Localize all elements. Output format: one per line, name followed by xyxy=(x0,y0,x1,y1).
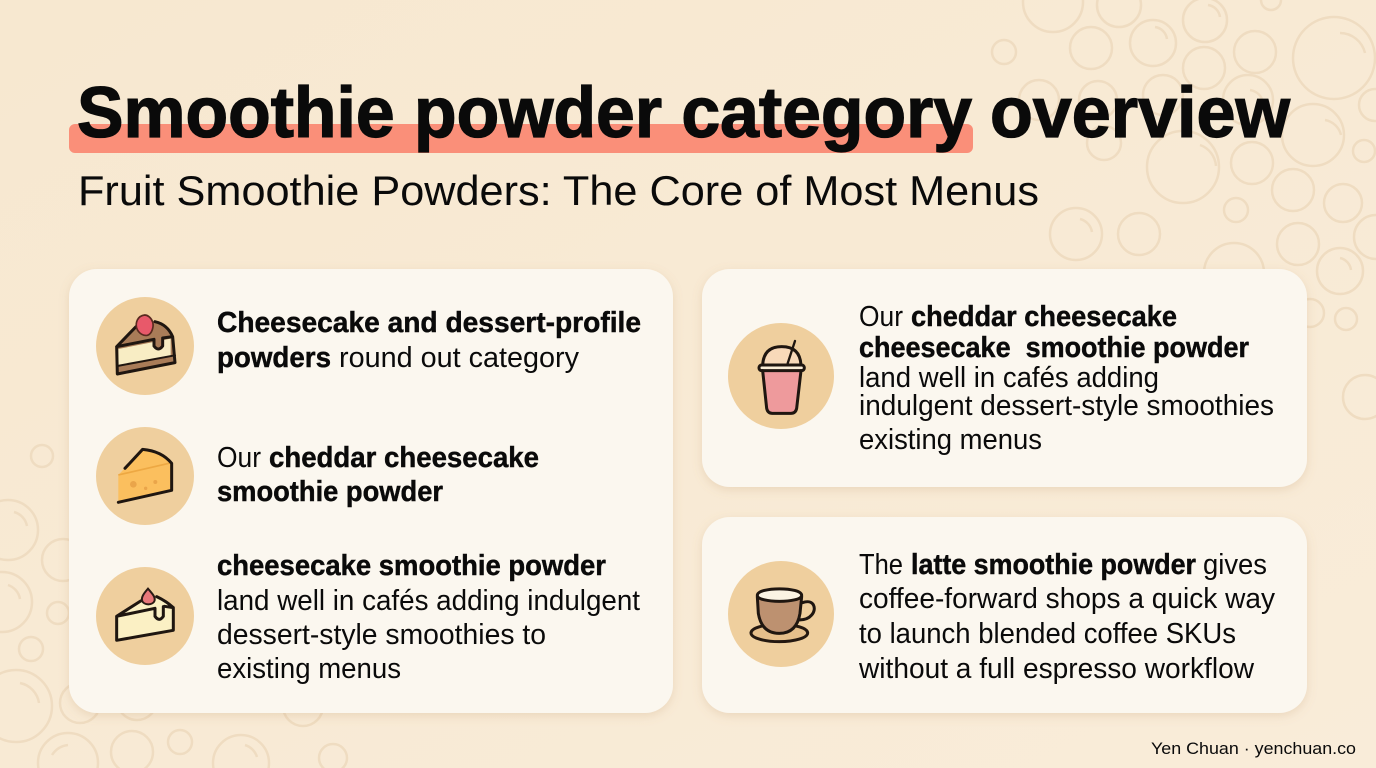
text: cheddar cheesecake smoothie powder: cheddar cheesecake xyxy=(911,301,1177,333)
text: our cheddar cheesecake: cheddar cheesecake xyxy=(269,442,539,474)
text: latte smoothie powder: The xyxy=(859,549,903,581)
text: cheesecake smoothie powder: cheesecake smoothie powder xyxy=(217,550,606,582)
panel: bottom right card xyxy=(702,517,1307,713)
text: latte smoothie powder: to launch blended coffee SKUs xyxy=(859,618,1236,650)
text: cheesecake and dessert-profile: round out category xyxy=(339,342,580,374)
text: latte smoothie powder: without a full espresso workflow xyxy=(858,653,1254,685)
text: cheddar cheesecake smoothie powder: indulgent dessert-style smoothies xyxy=(859,390,1274,422)
panel: top right card xyxy=(702,269,1307,487)
text: our cheddar cheesecake: Our xyxy=(217,442,261,474)
title xyxy=(69,74,1291,153)
text: cheddar cheesecake smoothie powder: land well in cafés adding xyxy=(859,362,1159,394)
text: cheesecake and dessert-profile: powders xyxy=(217,342,331,374)
subtitle: Fruit Smoothie Powders: The Core of Most Menus xyxy=(78,167,1039,214)
icon: latte cup xyxy=(728,561,834,667)
text: cheesecake and dessert-profile: Cheesecake and dessert-profile xyxy=(217,307,641,339)
text: cheddar cheesecake smoothie powder: cheesecake smoothie powder xyxy=(859,332,1249,364)
text: cheesecake smoothie powder: dessert-style smoothies to xyxy=(217,619,546,651)
text: cheddar cheesecake smoothie powder: Our xyxy=(859,301,903,333)
text: our cheddar cheesecake: smoothie powder xyxy=(217,476,443,508)
text: latte smoothie powder xyxy=(858,549,1276,685)
icon: cheddar wedge xyxy=(96,427,194,525)
title highlight xyxy=(69,124,973,153)
text: latte smoothie powder: coffee-forward shops a quick way xyxy=(859,583,1276,615)
icon: smoothie cup xyxy=(728,323,834,429)
title text: Smoothie powder category xyxy=(77,74,972,153)
text: cheesecake and dessert-profile xyxy=(217,307,641,374)
text: cheesecake smoothie powder: land well in cafés adding indulgent xyxy=(217,585,640,617)
panel: left card xyxy=(69,269,673,713)
text: cheddar cheesecake smoothie powder: existing menus xyxy=(859,424,1042,456)
text: cheddar cheesecake smoothie powder xyxy=(859,301,1274,456)
text: our cheddar cheesecake xyxy=(217,442,539,508)
text: cheesecake smoothie powder xyxy=(217,550,640,685)
icon: plain cheesecake slice xyxy=(96,567,194,665)
icon: cheesecake with dark base xyxy=(96,297,194,395)
title text: overview xyxy=(990,74,1291,153)
text: cheesecake smoothie powder: existing menus xyxy=(217,653,401,685)
text: latte smoothie powder: gives xyxy=(1203,549,1267,581)
footer credit: Yen Chuan · yenchuan.co xyxy=(1151,739,1356,758)
text: latte smoothie powder: latte smoothie powder xyxy=(911,549,1196,581)
